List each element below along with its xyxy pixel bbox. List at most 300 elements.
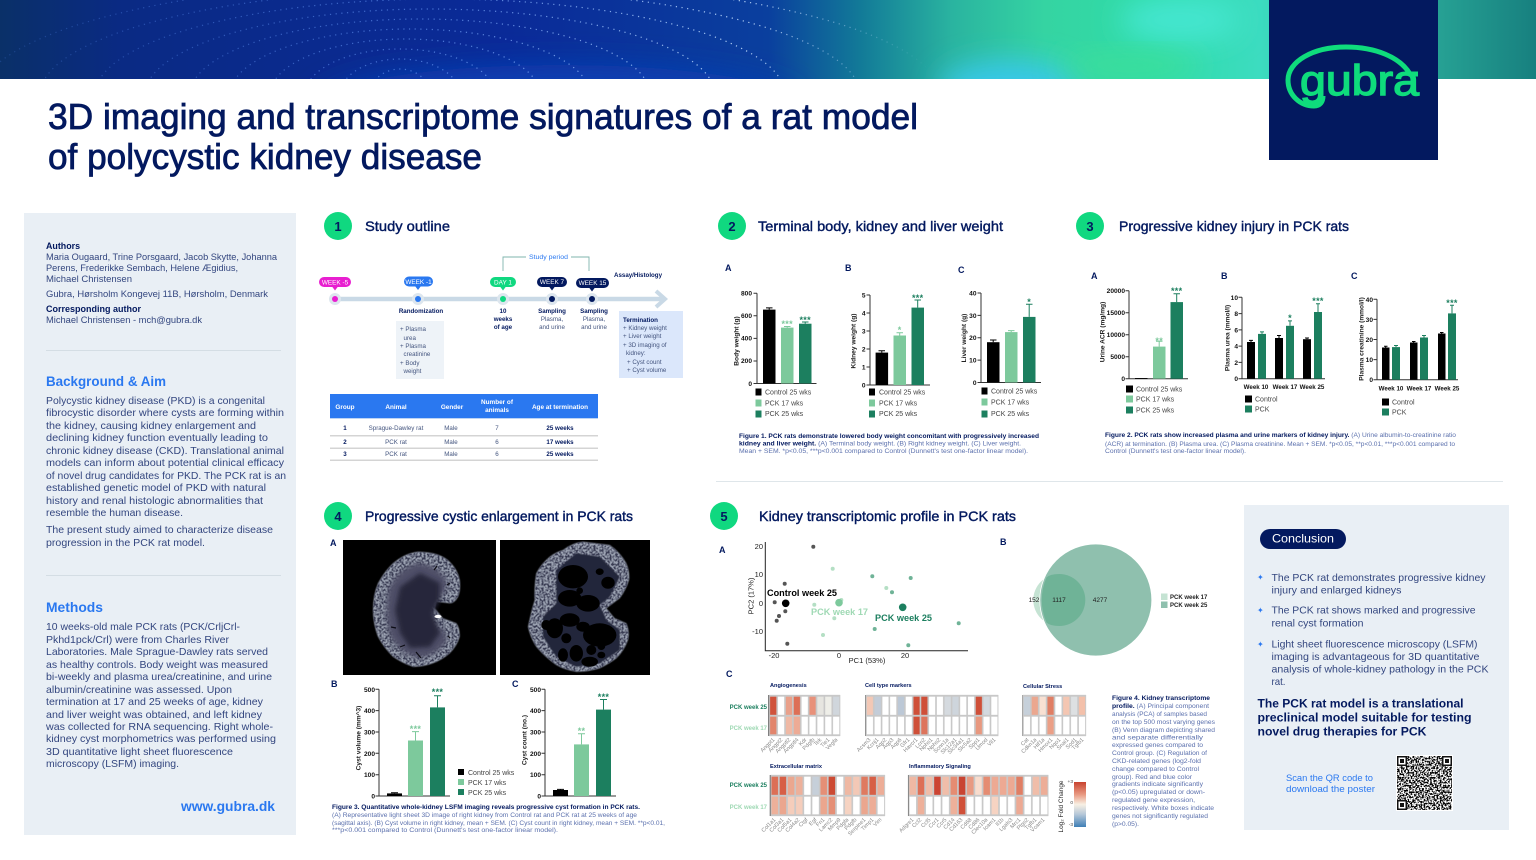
conclusion pill: Conclusion: [1272, 532, 1334, 546]
termination box: + Liver weight: [623, 333, 662, 340]
termination box: + Kidney weight: [623, 325, 667, 332]
panel: conclusion: [1244, 505, 1509, 830]
chart 2C: plasma creatinine: PCK: [1392, 410, 1407, 416]
conclusion bullets: [1257, 572, 1488, 688]
heatmap: angiogenesis: Kdr: [798, 737, 809, 748]
figure 1 caption: Mean + SEM. *p<0.05, ***p<0.001 compared to Control (Dunnett's test one-factor linear model).: [739, 448, 1028, 455]
study groups table: 1: [343, 425, 347, 432]
heatmap: extracellular matrix: Egf: [808, 817, 819, 827]
marker week 15: WEEK 15: [579, 280, 607, 287]
heatmap: inflammatory signaling: Cd86: [968, 817, 981, 831]
heatmap: extracellular matrix: Pdgfb: [844, 817, 858, 832]
heading: study outline: 1: [334, 219, 342, 234]
background and aim: established genetic model of PKD with natural: [46, 482, 266, 494]
chart 2C: plasma creatinine: ***: [1446, 298, 1458, 308]
study groups table: Group: [335, 404, 355, 411]
chart 3B: cyst volume: ***: [432, 687, 443, 697]
chart 3C: cyst count: **: [578, 726, 585, 736]
heatmap: extracellular matrix: Mmp9: [827, 817, 842, 832]
chart 2B: plasma urea: 4: [1234, 344, 1238, 350]
authors: Michael Christensen - mch@gubra.dk: [46, 315, 202, 325]
QR prompt: Scan the QR code to: [1286, 773, 1373, 783]
chart 2C: plasma creatinine: Week 17: [1407, 386, 1432, 392]
figure 4 caption: (B) Venn diagram depicting shared: [1112, 727, 1216, 734]
chart 2A: urine ACR: PCK 17 wks: [1136, 396, 1175, 404]
background and aim: fibrocystic disorder where cysts are forming within: [46, 407, 284, 419]
heatmap: extracellular matrix: [761, 764, 885, 837]
figure 4 caption: and separate differentially: [1112, 734, 1204, 742]
study groups table: Male: [444, 425, 458, 432]
PCA scatter plot: 0: [837, 651, 841, 660]
chart 1C: liver weight: PCK 17 wks: [991, 400, 1030, 406]
chart 1A: body weight: ***: [781, 319, 793, 329]
marker week -1: WEEK -1: [405, 279, 432, 286]
PCA scatter plot: -10: [752, 627, 763, 636]
heatmap: cell type markers: Cell type markers: [865, 683, 912, 689]
heatmap: cell type markers: Acsm3: [856, 737, 872, 754]
chart 1B: kidney weight: ***: [912, 293, 924, 303]
figure 4 caption: profile. (A) Principal component: [1112, 703, 1209, 710]
figure 2 caption: Control (Dunnett's test one-factor linear model).: [1105, 448, 1246, 455]
sampling week 7: [538, 308, 566, 331]
heatmap: extracellular matrix: Lamc2: [818, 817, 834, 833]
heatmap: cell type markers: Aqp3: [882, 737, 895, 751]
study timeline: [319, 255, 683, 379]
heatmap: cellular stress: Hmox1: [1038, 737, 1054, 754]
study groups table: PCK rat: [385, 451, 407, 458]
sampling week 7: Sampling: [538, 308, 566, 315]
sampling week 7: and urine: [539, 324, 565, 331]
chart 1B: kidney weight: B: [845, 263, 852, 273]
heatmap: cellular stress: Cat: [1020, 737, 1031, 748]
heatmap: inflammatory signaling: Ccl2: [911, 817, 923, 829]
conclusion bullets: The PCK rat demonstrates progressive kidney: [1272, 572, 1486, 584]
heatmap: cell type markers: Slc34a1: [947, 737, 965, 756]
conclusion bullets: injury and enlarged kidneys: [1272, 584, 1402, 596]
methods: termination at 17 and 25 weeks of age, kidney: [46, 696, 264, 708]
figure 3 legend: Control 25 wks: [468, 770, 515, 777]
heatmap: cell type markers: Aqp2: [875, 737, 888, 751]
heatmap: angiogenesis: Pdgfb: [802, 737, 816, 752]
termination box: + Cyst volume: [627, 367, 667, 374]
sampling week 7: Plasma,: [541, 316, 563, 323]
methods: Laboratories. Male Sprague-Dawley rats served: [46, 646, 268, 658]
heatmap: inflammatory signaling: Cd68: [960, 817, 973, 831]
heatmap: inflammatory signaling: Tgfb1: [1024, 817, 1038, 832]
heatmap: cellular stress: Cdkn1a: [1021, 737, 1039, 755]
chart 2C: plasma creatinine: Week 25: [1435, 386, 1460, 392]
chart 1B: kidney weight: 3: [862, 328, 866, 336]
randomization: creatinine: [404, 351, 431, 358]
chart 2B: plasma urea: Control: [1255, 396, 1278, 404]
chart 1C: liver weight: PCK 25 wks: [991, 411, 1030, 418]
PCA scatter plot: 20: [901, 651, 909, 660]
study timeline: Assay/Histology: [614, 273, 663, 279]
study groups table: 7: [495, 425, 499, 432]
QR prompt: download the poster: [1286, 784, 1375, 794]
randomization: weight: [402, 368, 422, 375]
heatmap: inflammatory signaling: Il1b: [995, 817, 1005, 828]
Venn diagram: PCK week 25: [1170, 603, 1208, 609]
chart 2B: plasma urea: Plasma urea (mmol/l): [1224, 305, 1232, 371]
chart 1C: liver weight: 0: [973, 380, 977, 387]
study groups table: 25 weeks: [546, 425, 574, 432]
chart 2B: plasma urea: *: [1288, 313, 1292, 323]
heatmap: extracellular matrix: Ctgf: [798, 817, 810, 829]
heatmap: extracellular matrix: Col5a1: [777, 817, 793, 834]
heatmap: angiogenesis: Tie1: [820, 737, 831, 749]
chart 1B: kidney weight: [845, 263, 930, 418]
chart 1B: kidney weight: 4: [862, 310, 866, 318]
chart 2A: urine ACR: [1091, 271, 1188, 414]
QR prompt: [1286, 773, 1375, 794]
methods: and liver weight was obtained, and left kidney: [46, 709, 263, 721]
website link: www.gubra.dk: [180, 798, 275, 814]
study period bracket: [503, 255, 589, 271]
chart 1B: kidney weight: *: [898, 325, 902, 335]
heatmap: inflammatory signaling: Vcam1: [1030, 817, 1046, 834]
chart 3B: cyst volume: 0: [371, 794, 375, 800]
methods: Pkhd1pck/Crl) were from Charles River: [46, 634, 229, 646]
heatmap: cell type markers: Lcn2: [915, 737, 927, 750]
heatmap row labels top: PCK week 25: [730, 705, 768, 711]
figure 4 caption: expressed genes compared to: [1112, 742, 1204, 749]
PCA scatter plot: [719, 542, 968, 665]
marker week 7: WEEK 7: [540, 279, 565, 286]
figure 3 caption: (A) Representative light sheet 3D image of right kidney from Control rat and PCK rat at 25 weeks of age: [332, 812, 638, 819]
chart 1A: body weight: PCK 25 wks: [765, 411, 804, 418]
heatmap: cellular stress: Sod1: [1065, 737, 1078, 751]
chart 2B: plasma urea: 2: [1234, 360, 1238, 367]
heatmap colour scale: Log₂ Fold Change: [1059, 780, 1065, 832]
chart 1A: body weight: 400: [741, 336, 752, 342]
heatmap: cell type markers: Vil1: [987, 737, 997, 748]
heading: study outline: Study outline: [365, 218, 450, 234]
chart 2C: plasma creatinine: 40: [1366, 297, 1373, 304]
heatmap: cellular stress: Tgfb1: [1071, 737, 1085, 752]
PCA scatter plot: PC1 (53%): [849, 656, 886, 665]
chart 1C: liver weight: [958, 265, 1041, 418]
text: A: [330, 538, 337, 548]
heatmap: extracellular matrix: Extracellular matrix: [770, 764, 823, 770]
conclusion bullets: ✦: [1257, 606, 1264, 615]
chart 2A: urine ACR: 5000: [1110, 354, 1125, 361]
methods: bi-weekly and plasma urea/creatinine, and urine: [46, 671, 272, 683]
chart 3C: cyst count: [512, 679, 616, 800]
chart 2C: plasma creatinine: 10: [1366, 357, 1373, 364]
chart 1C: liver weight: 30: [969, 313, 977, 320]
Venn diagram: B: [1000, 537, 1007, 547]
text: C: [726, 669, 733, 679]
study groups table: Sprague-Dawley rat: [369, 425, 424, 432]
conclusion statement: The PCK rat model is a translational: [1258, 696, 1464, 710]
PCA scatter plot: 20: [755, 542, 763, 551]
chart 3C: cyst count: 200: [530, 751, 541, 758]
conclusion bullets: ✦: [1257, 640, 1264, 649]
chart 2B: plasma urea: 6: [1234, 328, 1238, 334]
day 1 note: 10: [500, 308, 507, 315]
chart 2A: urine ACR: ***: [1171, 286, 1183, 296]
background and aim: models can inform about potential clinical efficacy: [46, 457, 285, 469]
study groups table: 2: [343, 439, 347, 446]
Venn diagram: 1117: [1052, 597, 1066, 604]
heatmap: extracellular matrix: Vim: [872, 817, 884, 828]
heatmap: inflammatory signaling: Lgals3: [999, 817, 1014, 833]
title: of polycystic kidney disease: [48, 136, 482, 177]
chart 1C: liver weight: 40: [969, 290, 977, 298]
chart 2B: plasma urea: Week 17: [1273, 384, 1298, 391]
chart 3B: cyst volume: B: [331, 679, 338, 689]
figure 1 caption: kidney and liver weight. (A) Terminal body weight. (B) Right kidney weight. (C) Liver weight.: [739, 440, 1021, 448]
heading: cystic enlargement: [324, 502, 633, 530]
heatmap: angiogenesis: Angpt2: [768, 737, 784, 754]
heatmap: extracellular matrix: Serpine1: [847, 817, 867, 837]
PCA scatter plot: PCK week 25: [875, 613, 932, 623]
marker week -1: [404, 276, 433, 305]
study groups table: Animal: [385, 404, 407, 411]
background and aim: Polycystic kidney disease (PKD) is a congenital: [46, 395, 265, 407]
chart 2A: urine ACR: 10000: [1107, 332, 1125, 339]
methods: [45, 599, 276, 770]
chart 3C: cyst count: ***: [598, 692, 609, 702]
heatmap: inflammatory signaling: Cd163: [949, 817, 964, 833]
heatmap: cell type markers: Slc5a2: [957, 737, 973, 754]
PCA scatter plot: PC2 (17%): [746, 577, 756, 614]
chart 1A: body weight: PCK 17 wks: [765, 400, 804, 408]
chart 1A: body weight: 800: [741, 290, 752, 298]
chart 3C: cyst count: Cyst count (no.): [522, 715, 528, 765]
chart 1C: liver weight: C: [958, 265, 965, 275]
authors: Maria Ougaard, Trine Porsgaard, Jacob Skytte, Johanna: [46, 252, 278, 262]
background and aim: progression in the PCK rat model.: [46, 537, 205, 549]
termination box: kidney:: [626, 350, 646, 357]
conclusion bullets: renal cyst formation: [1272, 618, 1364, 630]
study groups table: PCK rat: [385, 439, 407, 446]
conclusion bullets: rat.: [1272, 676, 1286, 688]
chart 1A: body weight: 600: [741, 313, 752, 320]
figure 4 caption: analysis (PCA) of samples based: [1112, 711, 1208, 718]
conclusion bullets: imaging is advantageous for 3D quantitative: [1272, 651, 1480, 663]
study groups table: animals: [485, 407, 509, 414]
conclusion bullets: Light sheet fluorescence microscopy (LSFM): [1272, 638, 1478, 650]
authors: Michael Christensen: [46, 274, 132, 284]
marker day 1: [490, 277, 516, 305]
methods: as healthy controls. Body weight was measured: [46, 659, 268, 671]
heatmap: angiogenesis: Angptl4: [783, 737, 800, 755]
chart 2A: urine ACR: Control 25 wks: [1136, 386, 1183, 394]
heading: terminal weight: [718, 212, 1003, 240]
heatmap: cell type markers: Havcr1: [903, 737, 919, 754]
kidney image: PCK rat: [500, 540, 650, 675]
figure 4 caption: [1112, 695, 1216, 828]
chart 2A: urine ACR: 15000: [1107, 310, 1125, 317]
chart 1B: kidney weight: Control 25 wks: [879, 390, 926, 396]
chart 1A: body weight: [725, 263, 816, 418]
chart 1A: body weight: ***: [799, 315, 811, 325]
figure 3 legend: [458, 769, 515, 797]
marker week 15: [576, 278, 609, 305]
randomization: [396, 308, 444, 379]
title: [48, 96, 918, 177]
chart 2A: urine ACR: Urine ACR (mg/mg): [1100, 302, 1106, 362]
chart 2C: plasma creatinine: Plasma creatinine (mmol/l): [1358, 297, 1366, 381]
figure 3 caption: [332, 804, 665, 834]
randomization: urea: [404, 335, 416, 342]
background and aim: declining kidney function eventually leading to: [46, 432, 268, 444]
chart 3C: cyst count: 400: [530, 708, 541, 715]
heatmap: angiogenesis: [760, 683, 840, 755]
heatmap colour scale: -3: [1069, 822, 1073, 828]
heatmap: cell type markers: Umod: [975, 737, 989, 752]
background and aim: history and renal histologic abnormalities that: [46, 495, 263, 507]
background and aim: Background & Aim: [46, 373, 166, 389]
header banner: [0, 0, 1536, 79]
heatmap row labels top: PCK week 17: [730, 726, 768, 732]
chart 2B: plasma urea: Week 25: [1300, 384, 1325, 391]
PCA scatter plot: 10: [755, 570, 763, 579]
methods: 3D quantitative light sheet fluorescence: [46, 746, 233, 758]
day 1 note: of age: [494, 324, 513, 331]
chart 1C: liver weight: 20: [969, 335, 977, 342]
heatmap: cell type markers: Nphs2: [927, 737, 942, 753]
figure 4 caption: gradients indicate significantly: [1112, 781, 1204, 788]
heading: terminal weight: Terminal body, kidney and liver weight: [758, 218, 1003, 234]
chart 1B: kidney weight: 2: [862, 346, 866, 354]
PCA scatter plot: 0: [759, 599, 763, 608]
chart 3B: cyst volume: [331, 679, 450, 800]
chart 2C: plasma creatinine: [1351, 271, 1460, 416]
heatmap: inflammatory signaling: Ccl5: [920, 817, 932, 829]
PCA scatter plot: PCK week 17: [811, 607, 868, 617]
figure 2 caption: [1105, 432, 1457, 455]
heatmap: cellular stress: Snai1: [1056, 737, 1070, 752]
heatmap: extracellular matrix: Col4a2: [785, 817, 801, 834]
chart 3C: cyst count: 100: [530, 772, 541, 779]
chart 2C: plasma creatinine: 0: [1369, 377, 1373, 384]
sampling week 15: and urine: [581, 324, 607, 331]
heatmap: inflammatory signaling: Inflammatory Signaling: [909, 764, 971, 770]
figure 3 caption: ***p<0.001 compared to Control (Dunnett's test one-factor linear model).: [332, 827, 558, 834]
study groups table: 17 weeks: [546, 439, 574, 446]
chart 3C: cyst count: 500: [530, 687, 541, 694]
heatmap: extracellular matrix: Timp1: [860, 817, 875, 832]
figure 4 caption: (p>0.05).: [1112, 821, 1139, 828]
chart 3C: cyst count: C: [512, 679, 519, 689]
figure 4 caption: genes not significantly regulated: [1112, 813, 1209, 820]
background and aim: The present study aimed to characterize disease: [46, 524, 273, 536]
randomization: + Body: [400, 360, 420, 367]
heading: kidney injury: 3: [1086, 219, 1094, 234]
chart 2A: urine ACR: PCK 25 wks: [1136, 408, 1175, 414]
heatmap: inflammatory signaling: Clec10a: [971, 817, 990, 836]
chart 2C: plasma creatinine: C: [1351, 271, 1358, 281]
figure 1 caption: Figure 1. PCK rats demonstrate lowered body weight concomitant with progressively increased: [739, 433, 1039, 440]
chart 1B: kidney weight: 5: [862, 292, 866, 300]
heatmap: extracellular matrix: Col3a1: [769, 817, 785, 834]
logo block: gubra: [1300, 57, 1419, 105]
chart 3C: cyst count: 300: [530, 730, 541, 736]
logo block: [1269, 0, 1438, 160]
termination box: + 3D imaging of: [623, 342, 667, 349]
heatmap: cell type markers: Nphs1: [919, 737, 934, 753]
figure 2 caption: Figure 2. PCK rats show increased plasma and urine markers of kidney injury. (A) Urine albumin-to-creatinine ratio: [1105, 432, 1457, 439]
panel: authors, background and methods: [24, 213, 296, 835]
figure 4 caption: change compared to Control: [1112, 766, 1199, 773]
background and aim: of novel drug candidates for PKD. The PCK rat is an: [46, 470, 286, 482]
figure 4 caption: respectively. White boxes indicate: [1112, 805, 1215, 812]
QR code: [1396, 755, 1453, 811]
figure 3 caption: Figure 3. Quantitative whole-kidney LSFM imaging reveals progressive cyst formation in PCK rats.: [332, 804, 640, 811]
study groups table: Age at termination: [532, 404, 588, 411]
chart 2A: urine ACR: 20000: [1107, 288, 1125, 295]
heatmap: cell type markers: Scnn1a: [933, 737, 951, 755]
Venn diagram: [1000, 537, 1208, 656]
PCA scatter plot: Control week 25: [767, 588, 837, 598]
background and aim: the kidney, causing kidney enlargement and: [46, 420, 256, 432]
heatmap: angiogenesis: Angptl2: [775, 737, 792, 755]
chart 2B: plasma urea: [1221, 271, 1325, 414]
day 1 note: weeks: [493, 316, 513, 323]
heatmap colour scale: +3: [1068, 779, 1073, 785]
authors: Authors: [46, 241, 80, 251]
chart 1C: liver weight: Liver weight (g): [961, 314, 968, 362]
figure 4 caption: (p<0.05) upregulated or down-: [1112, 789, 1205, 796]
chart 3B: cyst volume: ***: [410, 724, 421, 734]
study period bracket: Study period: [529, 255, 568, 261]
day 1 note: [493, 308, 513, 331]
heatmap row labels bottom: PCK week 25: [730, 783, 768, 789]
heatmap: inflammatory signaling: Cd14: [943, 817, 956, 831]
figure 4 caption: Figure 4. Kidney transcriptome: [1112, 695, 1211, 702]
heatmap: cellular stress: [1020, 684, 1086, 755]
heatmap: angiogenesis: Angpt1: [760, 737, 776, 754]
termination box: Termination: [623, 317, 658, 324]
Venn diagram: 152: [1029, 597, 1040, 604]
figure 4 caption: group). Red and blue color: [1112, 774, 1192, 781]
chart 1A: body weight: Body weight (g): [734, 316, 740, 366]
sampling week 15: Plasma,: [583, 316, 605, 323]
heatmap: inflammatory signaling: Ptgs2: [1016, 817, 1030, 832]
conclusion statement: [1258, 696, 1472, 738]
title: 3D imaging and transcriptome signatures of a rat model: [48, 96, 918, 137]
study groups table: 6: [495, 451, 499, 458]
background and aim: [46, 373, 286, 549]
heatmap row labels bottom: [730, 783, 768, 811]
marker week 7: [537, 277, 567, 305]
heatmap row labels bottom: PCK week 17: [730, 805, 768, 811]
chart 1C: liver weight: 10: [969, 358, 977, 364]
heatmap: cell type markers: Aqp6: [890, 737, 903, 751]
background and aim: resemble the human disease.: [46, 507, 183, 519]
marker day 1: DAY 1: [494, 280, 512, 286]
chart 2C: plasma creatinine: 30: [1366, 317, 1373, 324]
heatmap row labels top: [730, 705, 768, 732]
marker week -5: [319, 277, 351, 305]
authors: Gubra, Hørsholm Kongevej 11B, Hørsholm, Denmark: [46, 289, 268, 299]
heading: terminal weight: 2: [728, 219, 736, 234]
figure 4 caption: CKD-related genes (log2-fold: [1112, 758, 1202, 765]
heading: kidney injury: [1076, 212, 1349, 240]
study groups table: 25 weeks: [546, 451, 574, 458]
Venn diagram: 4277: [1093, 597, 1108, 604]
heatmap: inflammatory signaling: Ccr1: [928, 817, 940, 830]
kidney image: control: [343, 540, 496, 675]
heatmap: cellular stress: Cellular Stress: [1023, 684, 1062, 690]
randomization: + Plasma: [400, 343, 427, 350]
chart 1B: kidney weight: 1: [862, 364, 866, 372]
termination box: [619, 311, 683, 378]
chart 1A: body weight: A: [725, 263, 732, 273]
